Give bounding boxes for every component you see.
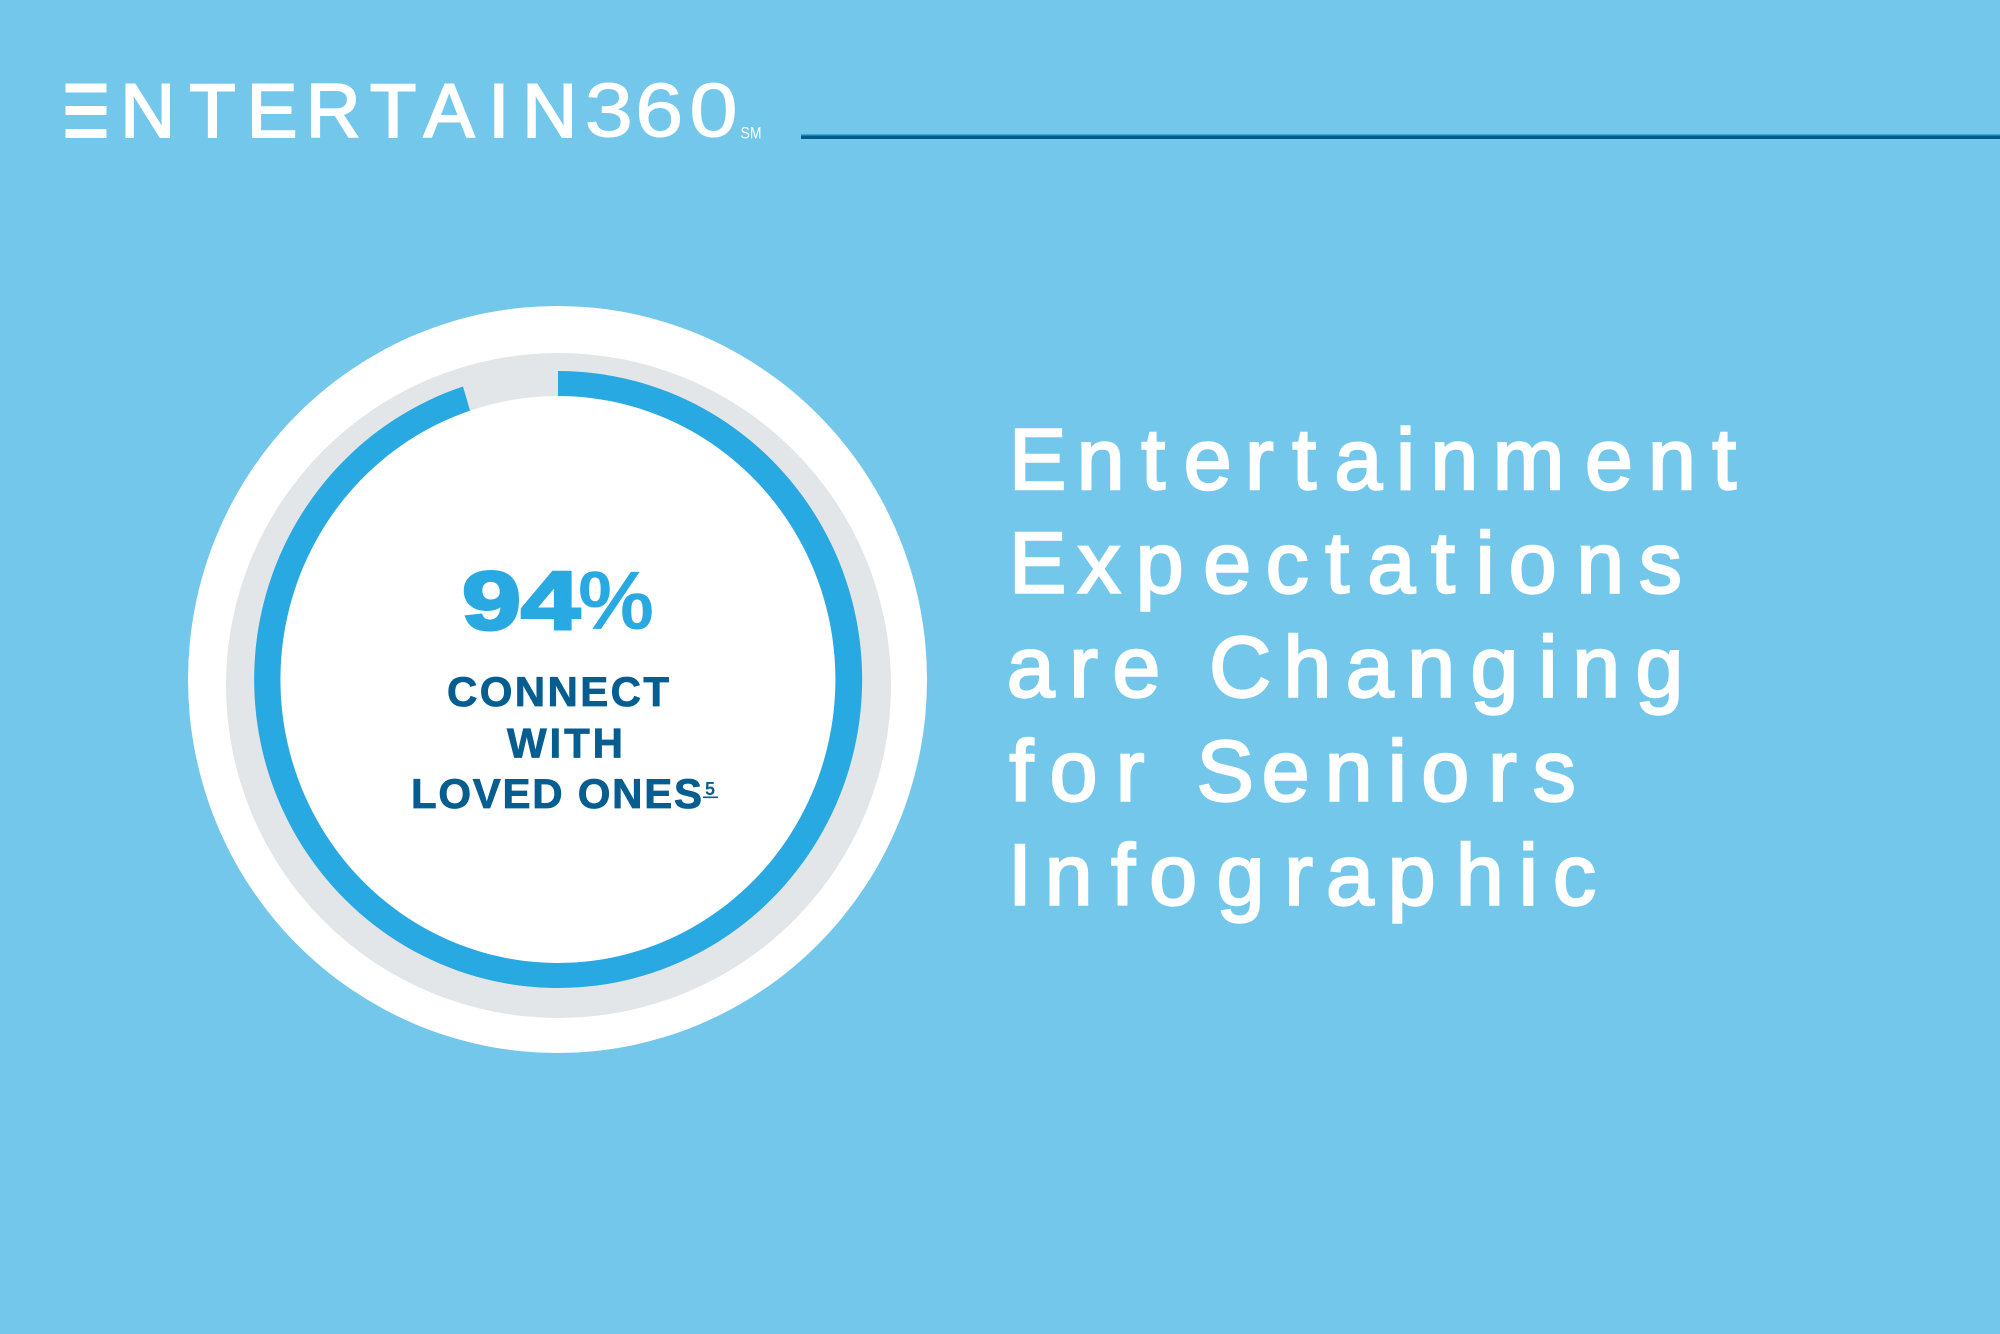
percentage bbox=[462, 554, 654, 647]
title line 3: are Changing bbox=[1007, 620, 1683, 716]
percent sign: % bbox=[578, 554, 654, 647]
footnote reference 5 bbox=[703, 779, 718, 799]
header rule bbox=[801, 134, 2000, 139]
service mark: SM bbox=[740, 124, 762, 142]
grey track ring bbox=[226, 353, 891, 1018]
logo: ENTERTAIN360 bbox=[65, 68, 762, 154]
inner white disc bbox=[280, 396, 836, 963]
caption line 2: WITH bbox=[507, 720, 623, 766]
title line 4: for Seniors bbox=[1009, 724, 1576, 820]
title line 1: Entertainment bbox=[1009, 412, 1736, 508]
blue progress arc bbox=[254, 371, 862, 988]
donut caption bbox=[411, 668, 702, 817]
percentage digits: 94 bbox=[462, 554, 580, 647]
title line 2: Expectations bbox=[1009, 516, 1682, 612]
donut chart panel: 94% bbox=[188, 306, 927, 1053]
caption line 3: LOVED ONES bbox=[411, 770, 702, 817]
title line 5: Infographic bbox=[1008, 828, 1596, 924]
footnote reference 5: 5 bbox=[705, 779, 715, 799]
outer white disc bbox=[188, 306, 927, 1053]
title bbox=[1007, 412, 1736, 924]
caption line 1: CONNECT bbox=[447, 668, 669, 715]
logo mark: three-bar E bbox=[66, 84, 106, 138]
logo wordmark digits: 360 bbox=[585, 68, 738, 153]
